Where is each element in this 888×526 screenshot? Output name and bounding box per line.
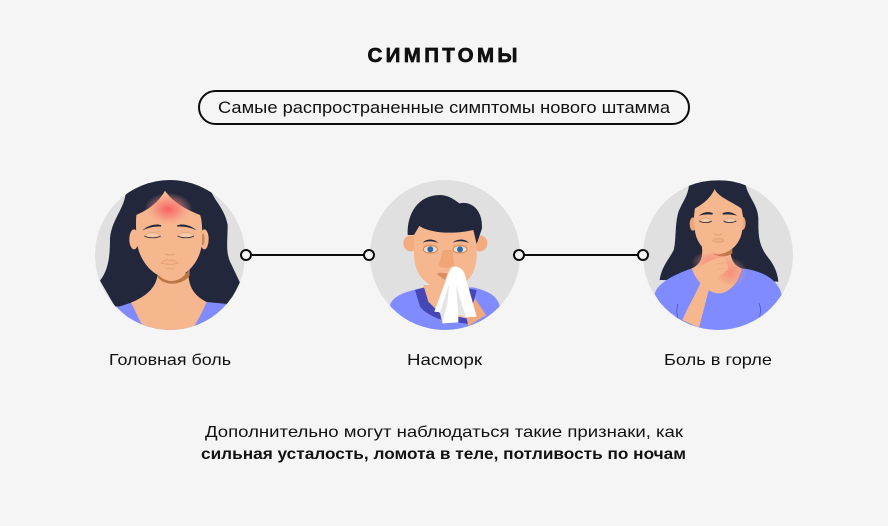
label: runny nose: Насморк bbox=[407, 352, 483, 369]
connector: headache to runny nose bbox=[241, 250, 374, 260]
icon: woman with headache bbox=[95, 179, 245, 330]
closing text: сильная усталость, ломота в теле, потливость по ночам bbox=[201, 446, 686, 463]
subtitle pill: Самые распространенные симптомы нового штамма bbox=[218, 99, 671, 117]
subtitle pill bbox=[199, 91, 689, 124]
label: headache: Головная боль bbox=[109, 352, 231, 369]
icon: woman with sore throat bbox=[643, 180, 793, 330]
title: СИМПТОМЫ bbox=[368, 44, 518, 67]
icon: man with tissue bbox=[370, 180, 520, 331]
infographic canvas bbox=[95, 48, 793, 462]
closing text: Дополнительно могут наблюдаться такие признаки, как bbox=[205, 424, 684, 441]
closing text bbox=[201, 424, 686, 463]
label: sore throat: Боль в горле bbox=[664, 352, 772, 369]
connector: runny nose to sore throat bbox=[514, 250, 648, 260]
